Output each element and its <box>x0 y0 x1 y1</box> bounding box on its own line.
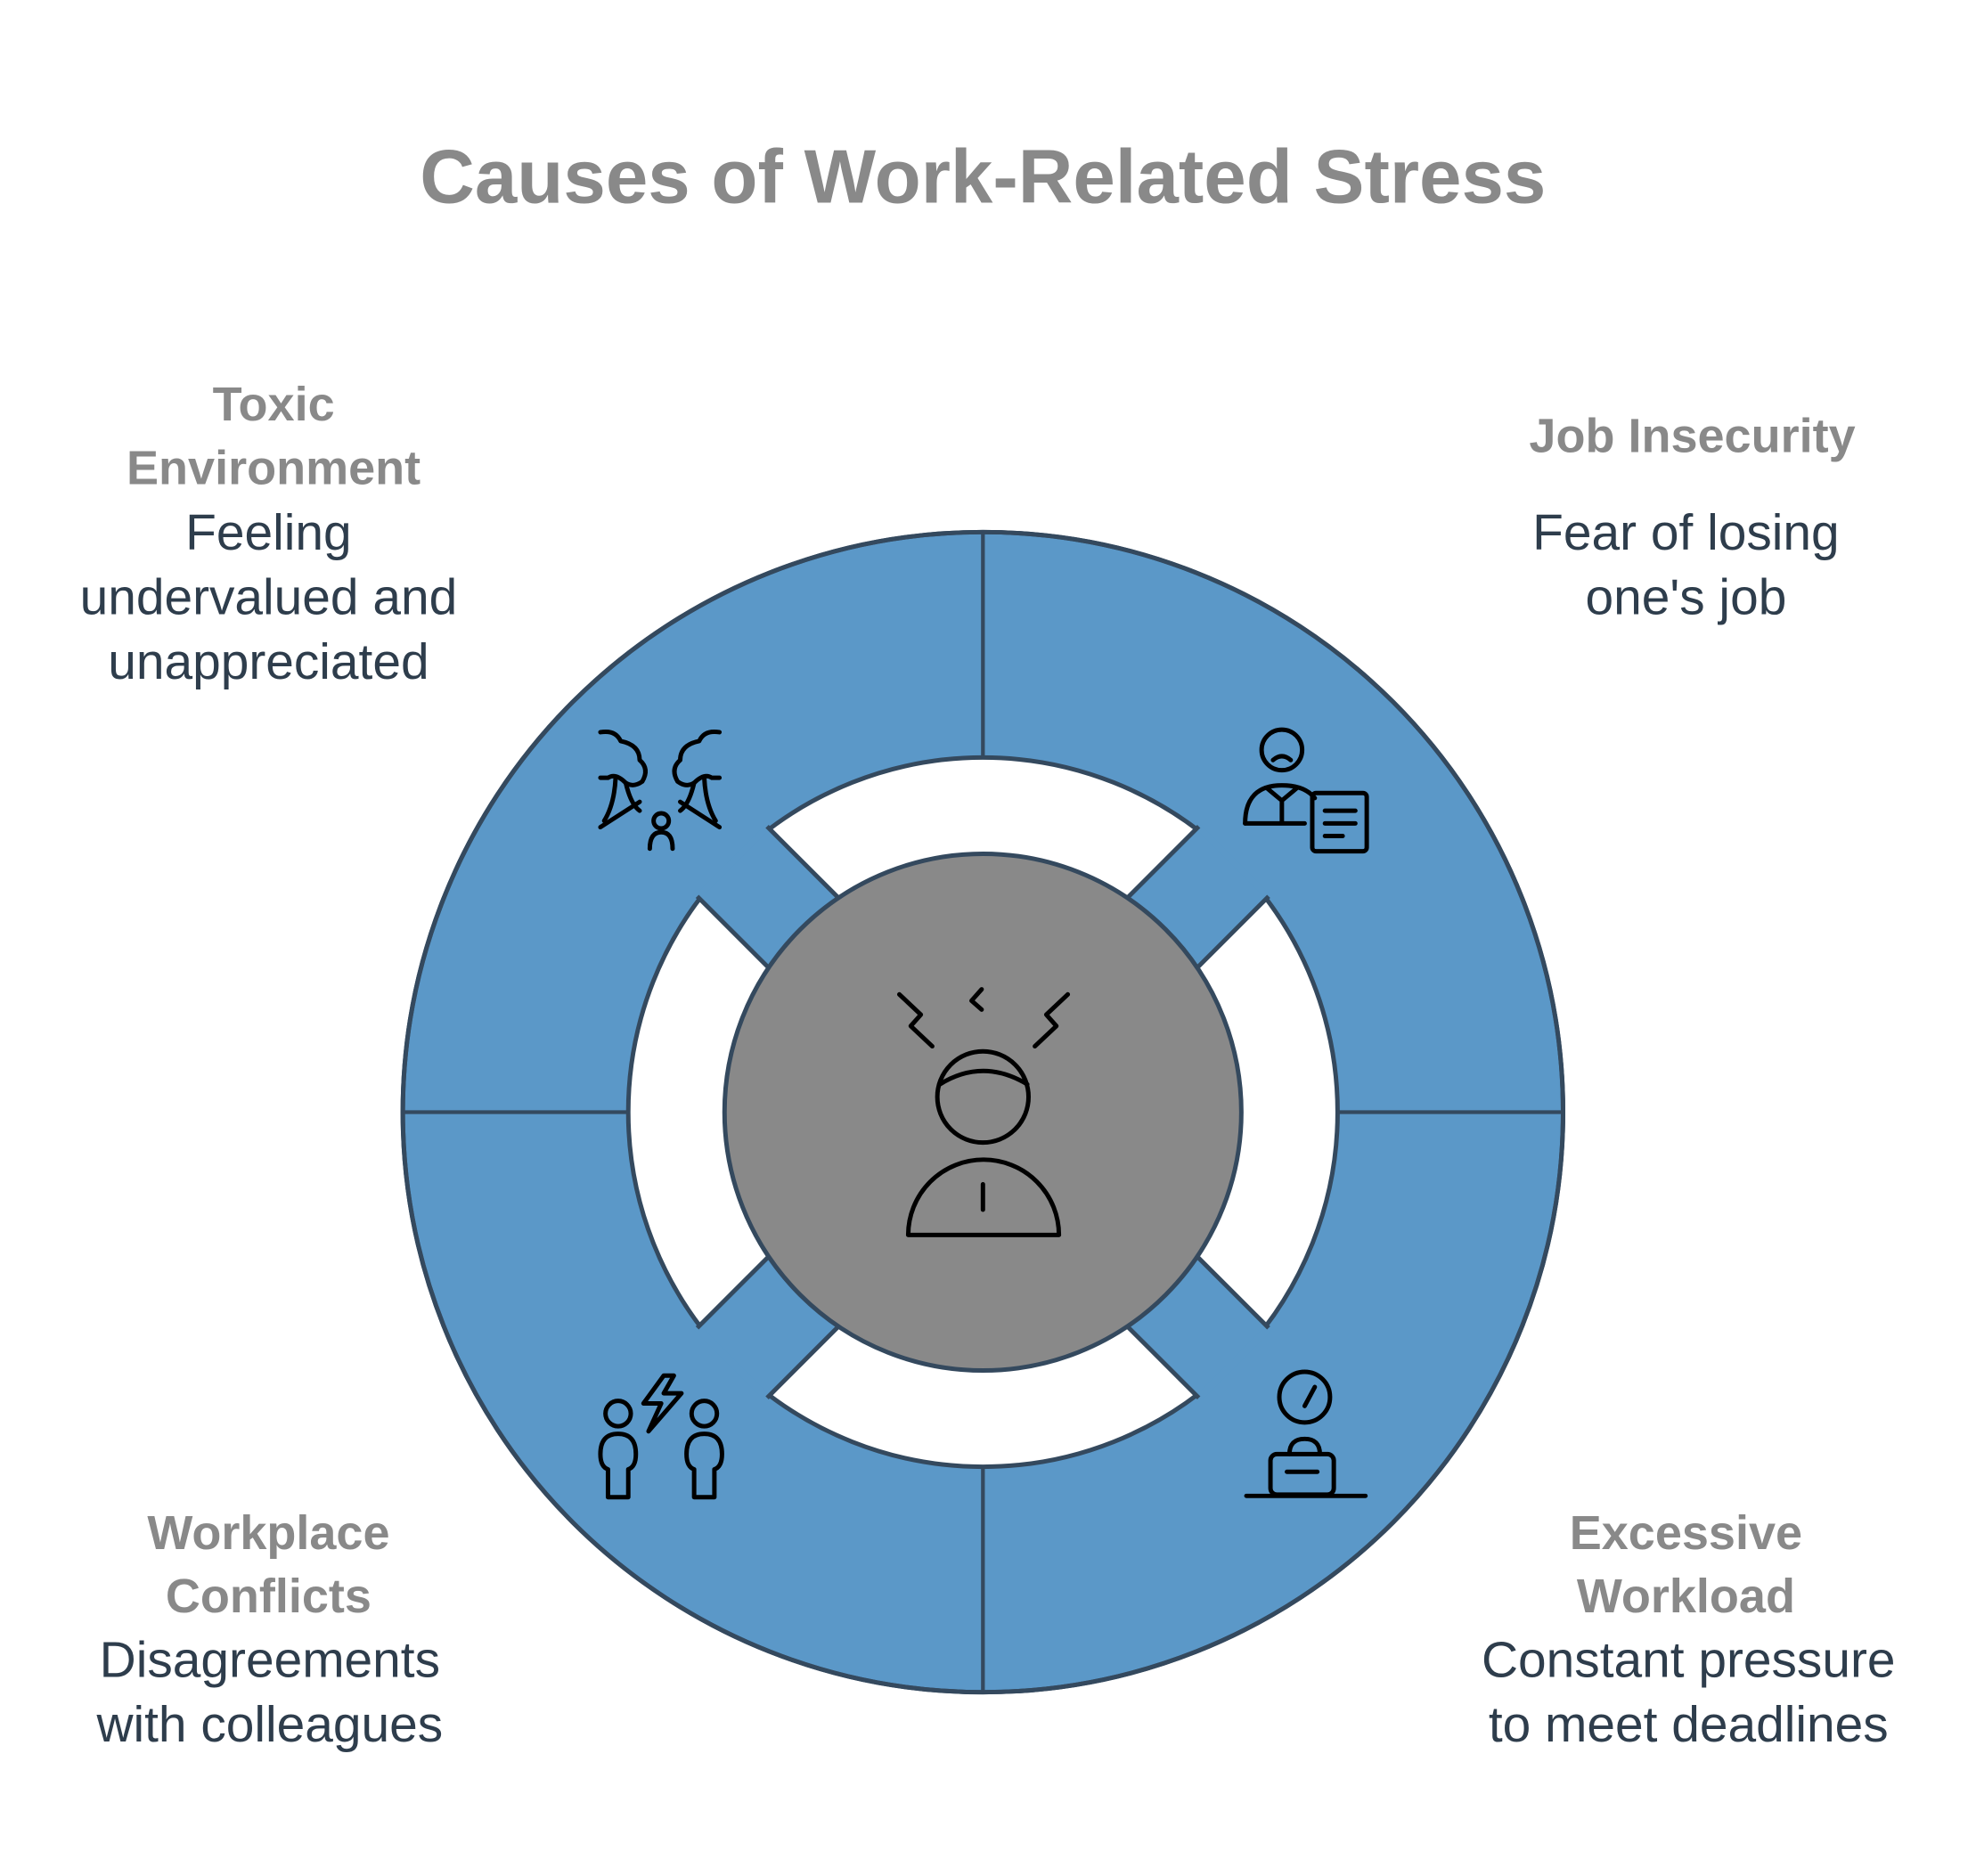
label: toxic environment: undervalued and <box>80 570 457 626</box>
label: excessive workload: Excessive <box>1570 1506 1802 1560</box>
label: excessive workload: Workload <box>1577 1570 1795 1623</box>
label: excessive workload: Constant pressure <box>1482 1633 1896 1689</box>
icon: excessive workload <box>1246 1372 1366 1496</box>
label: toxic environment: Environment <box>127 441 421 494</box>
icon: workplace conflicts <box>600 1375 722 1497</box>
label: toxic environment: Feeling <box>185 505 352 561</box>
label: workplace conflicts <box>95 1506 443 1753</box>
label: job insecurity <box>1529 410 1856 626</box>
label: job insecurity: Job Insecurity <box>1529 410 1856 463</box>
label: workplace conflicts: Conflicts <box>166 1570 372 1623</box>
label: workplace conflicts: Disagreements <box>100 1633 440 1689</box>
label: excessive workload <box>1482 1506 1896 1753</box>
label: toxic environment: unappreciated <box>108 634 429 690</box>
label: job insecurity: Fear of losing <box>1532 505 1840 561</box>
label: workplace conflicts: with colleagues <box>95 1697 443 1753</box>
label: toxic environment <box>80 378 457 690</box>
label: workplace conflicts: Workplace <box>147 1506 390 1560</box>
icon: job insecurity <box>1245 730 1367 852</box>
icon: toxic environment <box>600 731 720 849</box>
center circle <box>724 853 1241 1371</box>
label: toxic environment: Toxic <box>213 378 335 431</box>
label: job insecurity: one's job <box>1585 570 1786 626</box>
icon: stressed person <box>899 990 1068 1235</box>
title: Causes of Work-Related Stress <box>420 135 1546 220</box>
ring diagram <box>403 532 1563 1692</box>
label: excessive workload: to meet deadlines <box>1489 1697 1889 1753</box>
